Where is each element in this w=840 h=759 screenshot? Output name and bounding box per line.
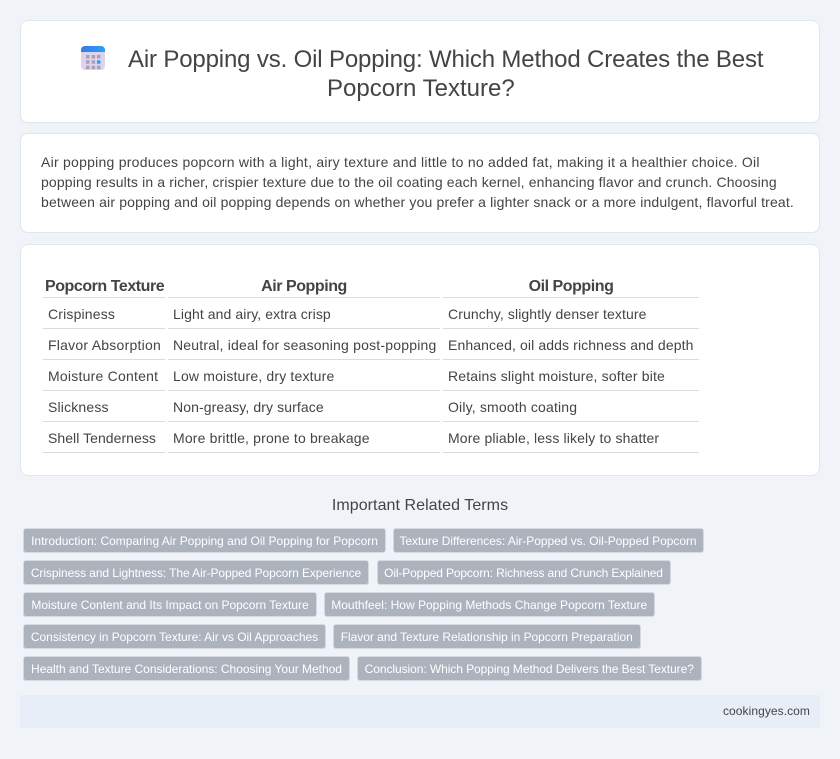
panel: comparison table: [20, 244, 820, 476]
footer source text: cookingyes.com: [723, 704, 810, 718]
tag: Crispiness and Lightness: The Air-Popped Popcorn Experience: [31, 566, 361, 580]
comparison table: Oil Popping: [529, 278, 613, 295]
row: shell tenderness: Shell Tenderness: [48, 430, 156, 446]
tag: [357, 656, 702, 681]
tag: Flavor and Texture Relationship in Popcorn Preparation: [341, 630, 633, 644]
comparison table: Oily, smooth coating: [448, 399, 577, 415]
tag: [324, 592, 654, 617]
tag: Conclusion: Which Popping Method Delivers the Best Texture?: [365, 662, 694, 676]
comparison table: Air Popping: [261, 278, 347, 295]
intro text: [41, 154, 794, 210]
tag: Consistency in Popcorn Texture: Air vs Oil Approaches: [31, 630, 318, 644]
tag: Moisture Content and Its Impact on Popcorn Texture: [31, 598, 309, 612]
intro text: Air popping produces popcorn with a light, airy texture and little to no added fat, making it a healthier choice. Oil: [41, 154, 760, 170]
row: slickness: Slickness: [48, 399, 109, 415]
comparison table: Retains slight moisture, softer bite: [448, 368, 665, 384]
heading: related terms: Important Related Terms: [332, 497, 508, 514]
tag: [23, 560, 369, 585]
tag: [23, 656, 350, 681]
tag: Mouthfeel: How Popping Methods Change Popcorn Texture: [331, 598, 647, 612]
comparison table: More brittle, prone to breakage: [173, 430, 370, 446]
row: flavor absorption: Flavor Absorption: [48, 337, 161, 353]
comparison table: Neutral, ideal for seasoning post-popping: [173, 337, 436, 353]
tag: [392, 528, 704, 553]
title: Air Popping vs. Oil Popping: Which Method Creates the Best: [128, 46, 763, 73]
comparison table: More pliable, less likely to shatter: [448, 430, 659, 446]
tag: Texture Differences: Air-Popped vs. Oil-Popped Popcorn: [399, 534, 697, 548]
comparison table: [43, 278, 699, 453]
tag: [376, 560, 670, 585]
tag: [23, 624, 326, 649]
comparison table: Non-greasy, dry surface: [173, 399, 324, 415]
comparison table: Enhanced, oil adds richness and depth: [448, 337, 694, 353]
title: Popcorn Texture?: [327, 75, 515, 102]
title: [128, 46, 764, 102]
intro text: between air popping and oil popping depends on whether you prefer a lighter snack or a more indulgent, flavorful treat.: [41, 194, 794, 210]
intro text: popping results in a richer, crispier texture due to the oil coating each kernel, enhancing flavor and crunch. Choosing: [41, 174, 777, 190]
related term tags: [23, 528, 704, 681]
comparison table: Light and airy, extra crisp: [173, 306, 331, 322]
tag: [23, 592, 317, 617]
tag: [23, 528, 386, 553]
comparison table: Low moisture, dry texture: [173, 368, 334, 384]
comparison table: Crunchy, slightly denser texture: [448, 306, 647, 322]
footer bar: [20, 695, 820, 728]
tag: [333, 624, 640, 649]
icon: calendar: [81, 46, 105, 70]
row: crispiness: Crispiness: [48, 306, 115, 322]
panel: title header: [20, 20, 820, 123]
row: moisture content: Moisture Content: [48, 368, 158, 384]
tag: Oil-Popped Popcorn: Richness and Crunch Explained: [384, 566, 663, 580]
table header: Popcorn Texture: [45, 278, 164, 295]
tag: Health and Texture Considerations: Choosing Your Method: [31, 662, 342, 676]
panel: introduction: [20, 133, 820, 233]
tag: Introduction: Comparing Air Popping and Oil Popping for Popcorn: [31, 534, 378, 548]
